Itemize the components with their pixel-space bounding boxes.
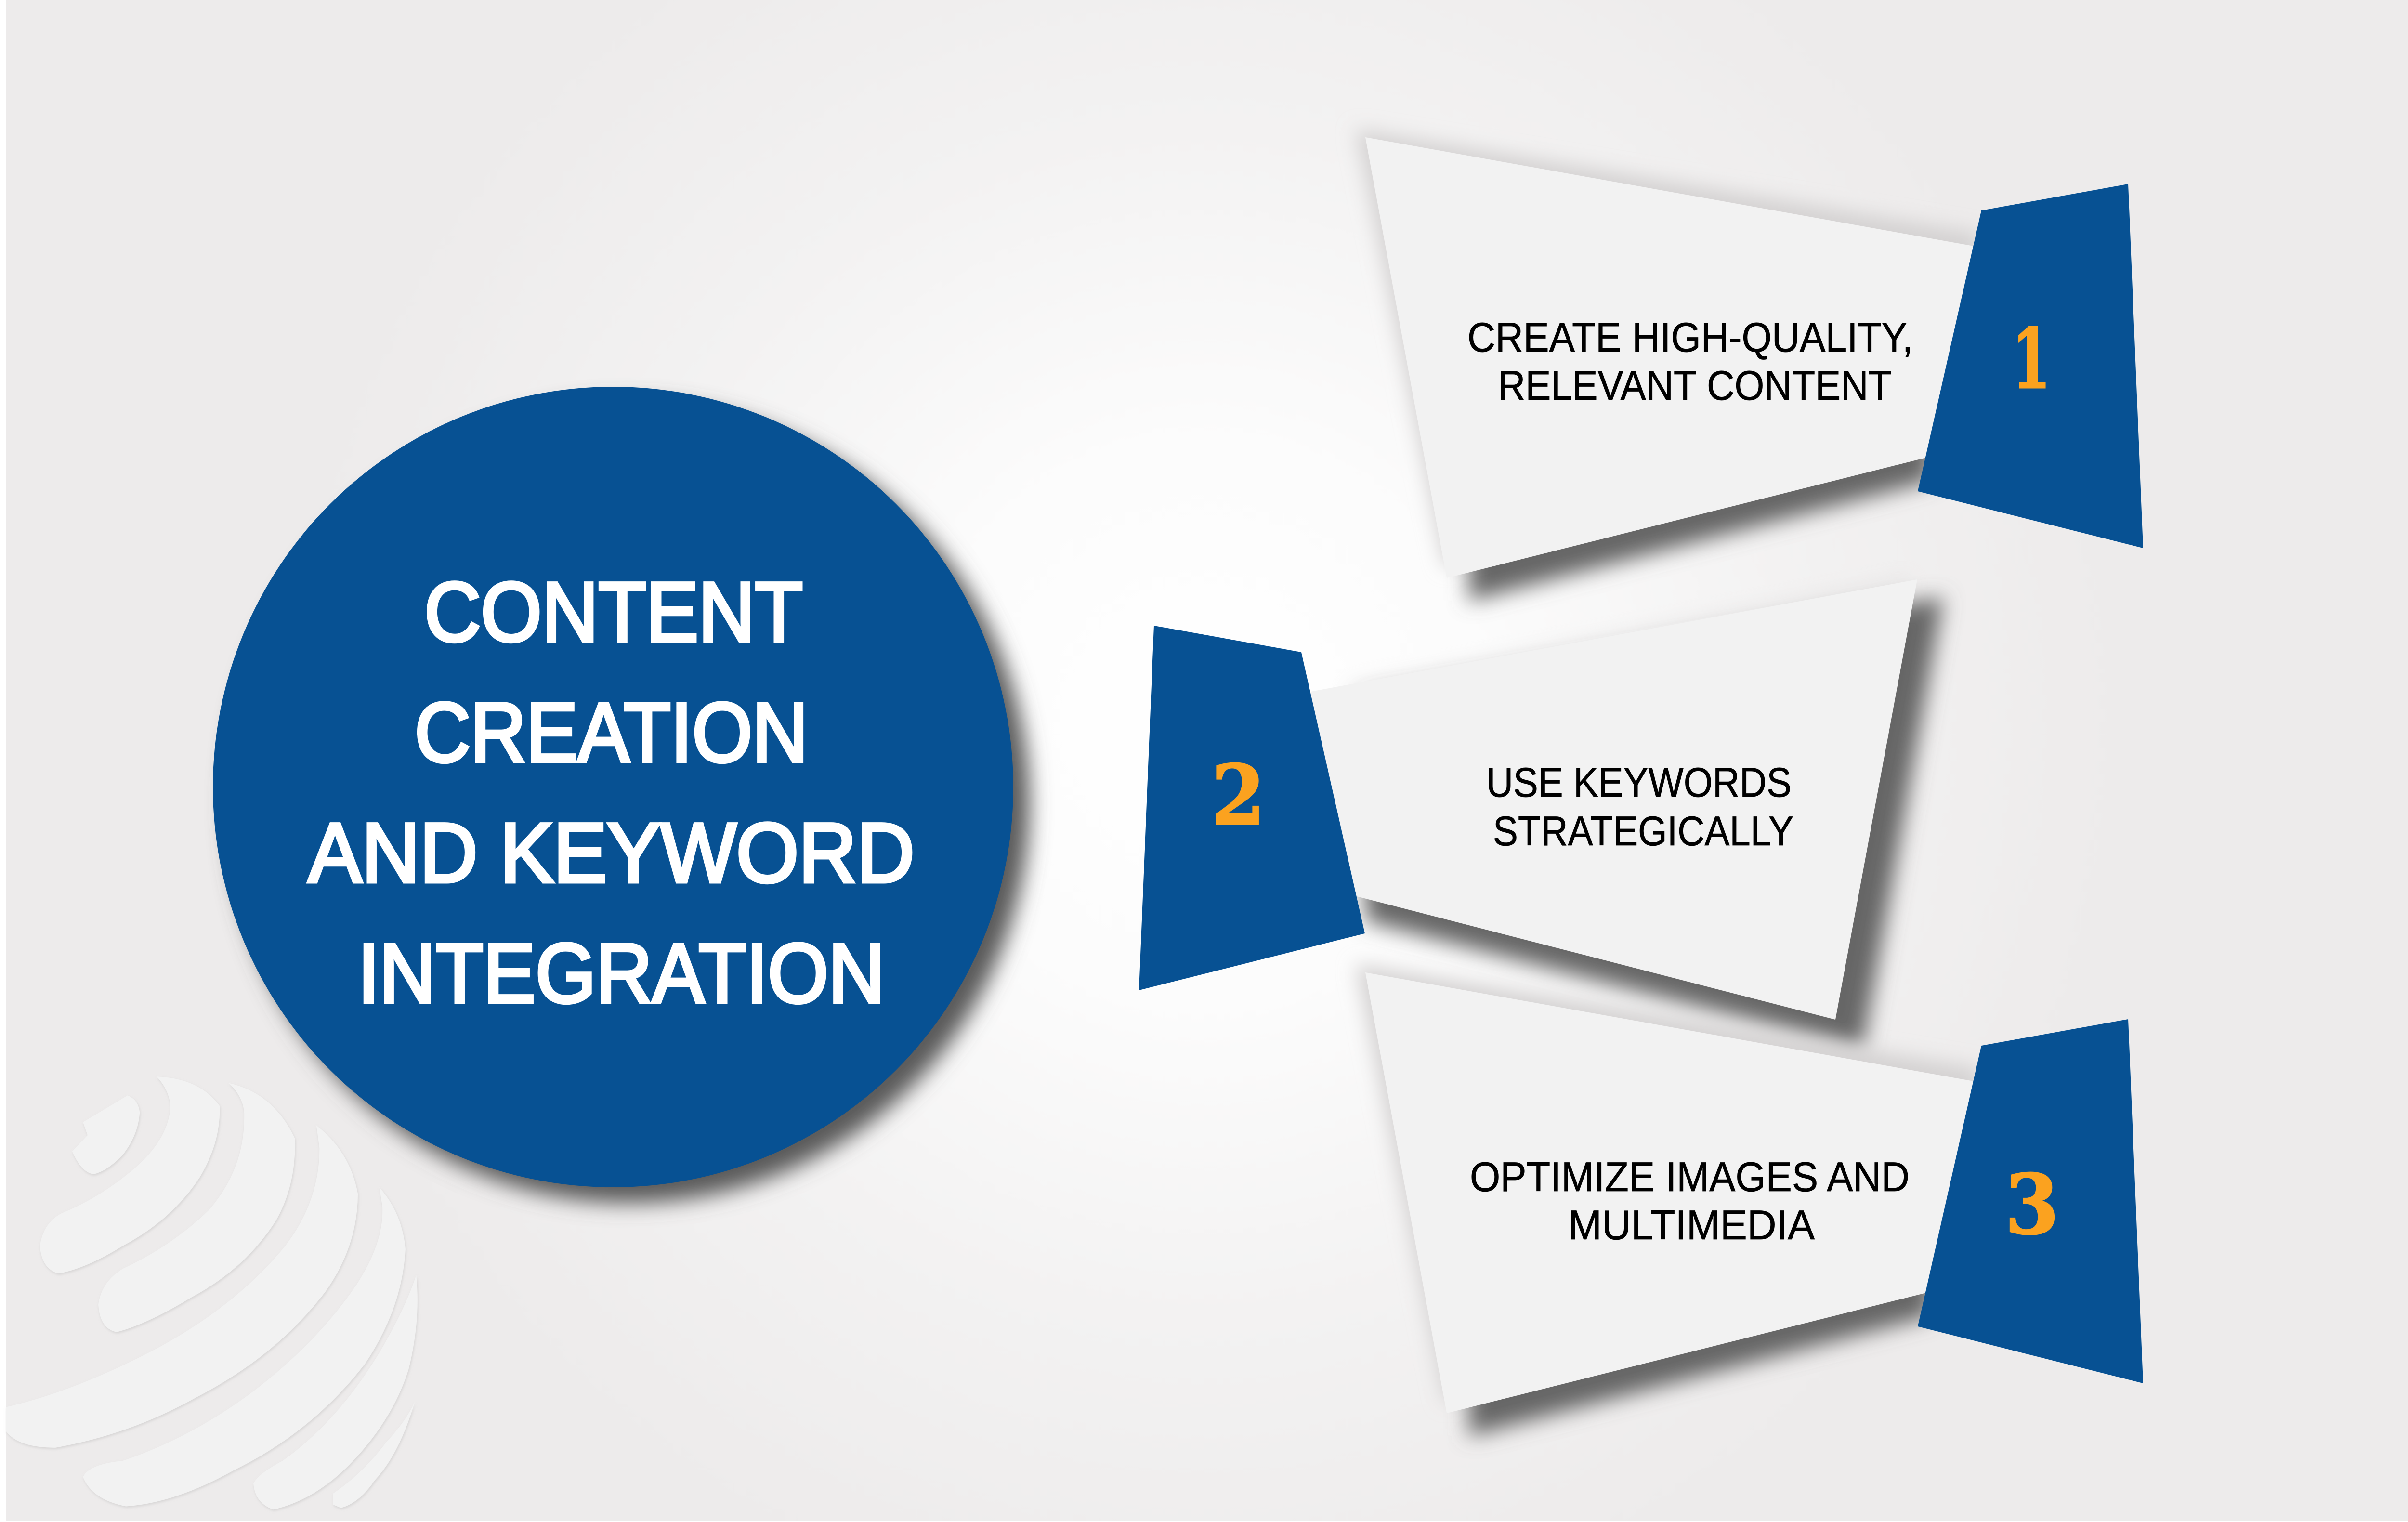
title	[308, 565, 915, 1021]
icon: watermark globe	[6, 1076, 418, 1509]
title: INTEGRATION	[358, 927, 885, 1021]
text: item 3: MULTIMEDIA	[1568, 1202, 1815, 1248]
text: item 2	[1486, 760, 1793, 854]
text: item 2: STRATEGICALLY	[1493, 808, 1793, 854]
title: AND KEYWORD	[308, 806, 915, 900]
badge: number 2	[1139, 626, 1365, 990]
badge: number 3: 3	[2005, 1156, 2059, 1253]
badge: number 2: 2	[1211, 747, 1265, 844]
badge: number 1: 1	[2012, 311, 2051, 407]
title: CREATION	[415, 686, 808, 780]
text: item 1: CREATE HIGH-QUALITY,	[1467, 315, 1913, 361]
badge: number 3	[1918, 1019, 2143, 1383]
badge: number 1	[1918, 184, 2143, 548]
panel: item 3	[1356, 964, 2143, 1436]
panel: central circle	[213, 387, 1030, 1203]
title: CONTENT	[424, 565, 803, 659]
text: item 1: RELEVANT CONTENT	[1498, 363, 1892, 409]
text: item 1	[1467, 315, 1913, 409]
text: item 3: OPTIMIZE IMAGES AND	[1470, 1154, 1910, 1200]
panel: item 2	[1139, 576, 1943, 1049]
text: item 2: USE KEYWORDS	[1486, 760, 1792, 806]
text: item 3	[1470, 1154, 1910, 1248]
panel: item 1	[1356, 129, 2143, 601]
